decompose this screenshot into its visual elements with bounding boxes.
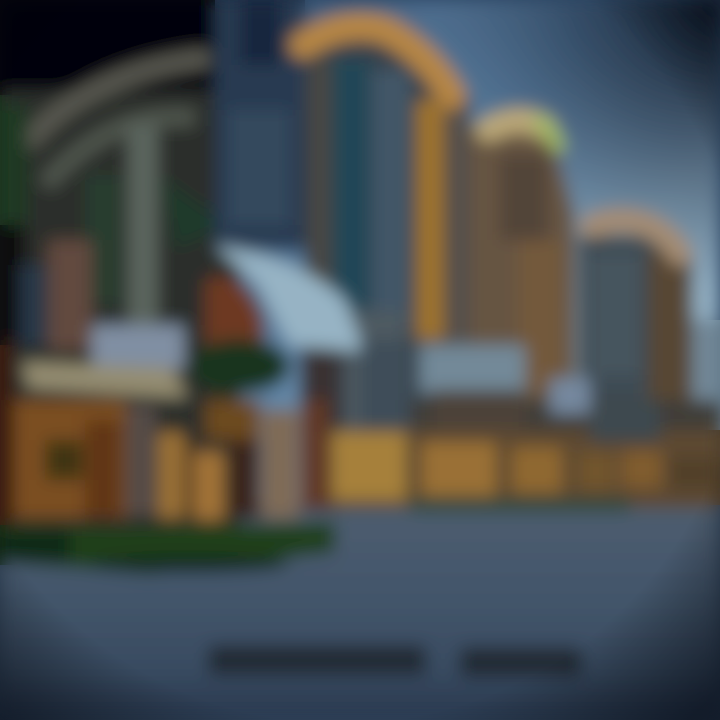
road: [0, 505, 720, 720]
ground floor backing: [300, 350, 720, 510]
green hedge: [0, 522, 335, 574]
far hedge line: [410, 498, 630, 512]
glass awning: [205, 245, 364, 352]
tower 1 orange arch: [303, 26, 452, 340]
tower 3: [578, 220, 692, 440]
blurred caption, right word: [460, 647, 582, 677]
tower 2 tan roof with green glow: [488, 120, 545, 130]
back tower, dark blue: [215, 0, 305, 250]
tower 2: [470, 120, 575, 410]
blurred caption, left word: [208, 645, 426, 675]
sky: [200, 0, 720, 520]
amber ground floor strip: [332, 432, 720, 500]
left orange podium: [0, 340, 328, 530]
tower 3 tan roof: [592, 220, 680, 254]
right lobby canopies: [360, 340, 660, 442]
round green shrub: [190, 339, 290, 393]
beige entrance canopy: [22, 362, 188, 398]
left dark building and palm tree: [0, 0, 240, 540]
tower 1: [303, 26, 470, 430]
